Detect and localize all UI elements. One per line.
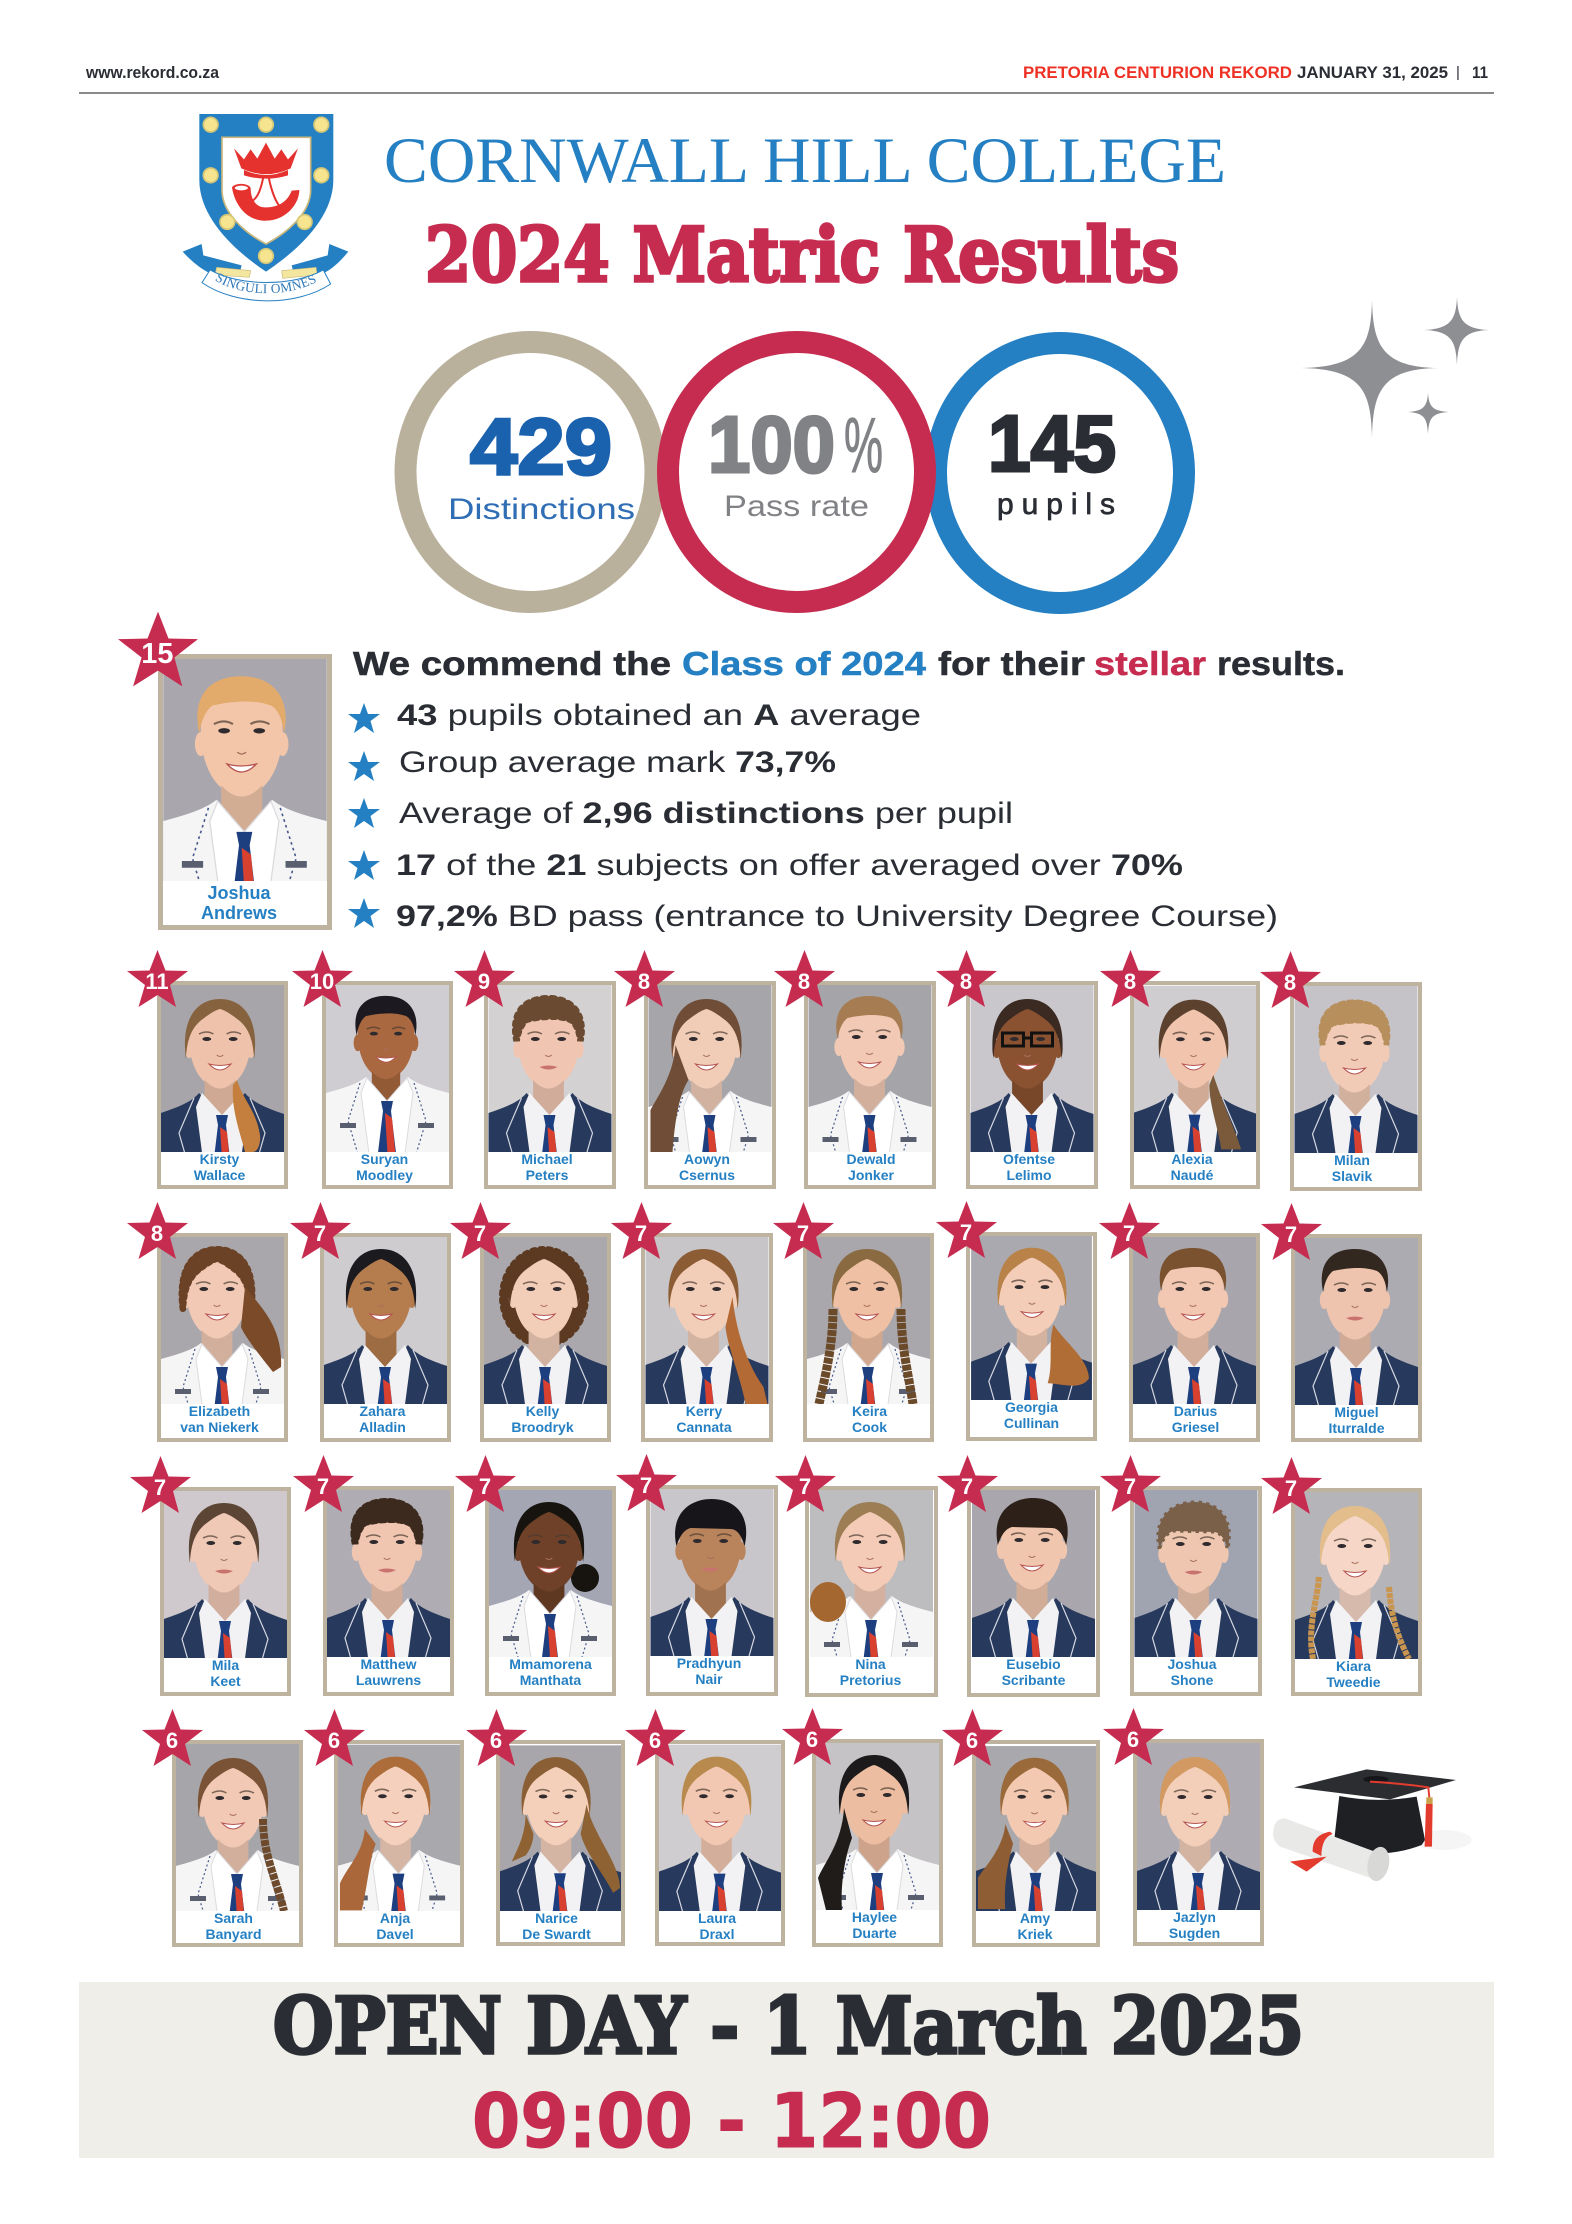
open day date: OPEN DAY - 1 March 2025 <box>273 1981 1304 2072</box>
pupil card: Joshua Andrews: Joshua <box>207 883 271 903</box>
pupil card: Ofentse Lelimo: 8 <box>960 969 972 994</box>
header: website: www.rekord.co.za <box>85 63 219 82</box>
pupil card: Haylee Duarte: Duarte <box>852 1924 897 1940</box>
pupil card: Alexia Naudé: Alexia <box>1171 1151 1213 1167</box>
pupil card: Milan Slavik: Milan <box>1334 1152 1370 1168</box>
pupil card: Haylee Duarte: 6 <box>806 1727 818 1752</box>
pupil card: Mmamorena Manthata <box>455 1455 616 1696</box>
pupil card: Sarah Banyard: 6 <box>166 1728 178 1753</box>
pupil card: Nina Pretorius <box>775 1455 938 1697</box>
stat: 100% pass rate: Pass rate <box>724 490 869 523</box>
pupil card: Sarah Banyard <box>142 1709 303 1947</box>
pupil card: Mmamorena Manthata: Manthata <box>520 1672 581 1688</box>
pupil card: Kerry Cannata: 7 <box>635 1221 647 1246</box>
pupil card: Suryan Moodley: Moodley <box>356 1166 413 1182</box>
pupil card: Dewald Jonker <box>774 950 936 1189</box>
heading: commendation: results. <box>1217 645 1345 682</box>
list: result bullet points: Group average mark 73,7% <box>399 746 836 779</box>
pupil card: Kirsty Wallace: 11 <box>145 969 169 994</box>
pupil card: Elizabeth van Niekerk <box>127 1202 288 1442</box>
pupil card: Matthew Lauwrens: 7 <box>317 1474 329 1499</box>
pupil card: Laura Draxl: Laura <box>698 1910 736 1926</box>
pupil card: Amy Kriek: Amy <box>1020 1910 1050 1926</box>
pupil card: Nina Pretorius: 7 <box>799 1474 811 1499</box>
header: publication, date and page: PRETORIA CENTURION REKORD <box>1023 63 1292 82</box>
heading: commendation: Class of 2024 <box>682 645 927 682</box>
title: school name: CORNWALL HILL COLLEGE <box>384 125 1226 197</box>
pupil card: Elizabeth van Niekerk: Elizabeth <box>189 1403 250 1419</box>
pupil card: Dewald Jonker: 8 <box>798 969 810 994</box>
pupil card: Amy Kriek: Kriek <box>1017 1926 1053 1942</box>
pupil card: Elizabeth van Niekerk: 8 <box>151 1221 163 1246</box>
pupil card: Michael Peters: 9 <box>478 969 490 994</box>
stat: 100% pass rate: % <box>844 401 883 489</box>
pupil card: Keira Cook: Keira <box>852 1403 887 1419</box>
pupil card: Anja Davel: 6 <box>328 1728 340 1753</box>
stat: 145 pupils <box>936 343 1184 603</box>
pupil card: Mmamorena Manthata: 7 <box>479 1474 491 1499</box>
pupil card: Zahara Alladin: Zahara <box>360 1403 405 1419</box>
list: result bullet points: Average of 2,96 distinctions per pupil <box>399 797 1013 830</box>
pupil card: Suryan Moodley <box>292 950 453 1189</box>
pupil card: Eusebio Scribante: Eusebio <box>1006 1656 1061 1672</box>
pupil card: Mila Keet <box>130 1456 291 1696</box>
pupil card: Keira Cook <box>773 1202 934 1442</box>
heading: commendation <box>353 645 1345 682</box>
pupil card: Joshua Shone: 7 <box>1124 1474 1136 1499</box>
pupil card: Darius Griesel <box>1099 1202 1260 1442</box>
pupil card: Aowyn Csernus: 8 <box>638 969 650 994</box>
pupil card: Narice De Swardt: De Swardt <box>522 1926 591 1942</box>
icon: graduation cap and diploma <box>1273 1769 1472 1883</box>
pupil card: Eusebio Scribante: 7 <box>961 1474 973 1499</box>
pupil card: Joshua Shone: Shone <box>1171 1672 1213 1688</box>
pupil card: Dewald Jonker: Jonker <box>848 1166 894 1182</box>
pupil card: Mila Keet: Mila <box>212 1657 239 1673</box>
stat: 145 pupils: pupils <box>997 488 1115 521</box>
pupil card: Milan Slavik <box>1260 951 1422 1191</box>
pupil card: Narice De Swardt: Narice <box>535 1910 578 1926</box>
stat: 429 distinctions: 429 <box>470 402 612 491</box>
pupil card: Ofentse Lelimo <box>936 950 1098 1189</box>
pupil card: Narice De Swardt <box>466 1709 625 1946</box>
stat: 429 distinctions <box>406 342 656 602</box>
pupil card: Darius Griesel: Darius <box>1174 1403 1217 1419</box>
pupil card: Ofentse Lelimo: Ofentse <box>1003 1151 1055 1167</box>
header: publication, date and page: | <box>1456 64 1460 81</box>
pupil card: Darius Griesel: Griesel <box>1172 1418 1219 1434</box>
pupil card: Suryan Moodley: 10 <box>310 969 334 994</box>
pupil card: Michael Peters <box>454 950 616 1189</box>
pupil card: Kerry Cannata: Kerry <box>686 1403 722 1419</box>
pupil card: Nina Pretorius: Pretorius <box>840 1672 901 1688</box>
pupil card: Zahara Alladin <box>290 1202 451 1442</box>
pupil card: Mmamorena Manthata: Mmamorena <box>509 1656 592 1672</box>
pupil card: Kirsty Wallace <box>127 950 288 1189</box>
pupil card: Alexia Naudé: 8 <box>1124 969 1136 994</box>
pupil card: Keira Cook: 7 <box>797 1221 809 1246</box>
pupil card: Michael Peters: Peters <box>526 1166 568 1182</box>
pupil card: Georgia Cullinan: Cullinan <box>1004 1414 1059 1430</box>
pupil card: Matthew Lauwrens: Matthew <box>360 1656 416 1672</box>
heading: commendation: We commend the <box>353 645 671 682</box>
pupil card: Alexia Naudé <box>1100 950 1260 1189</box>
pupil card: Amy Kriek: 6 <box>966 1728 978 1753</box>
pupil card: Laura Draxl <box>625 1709 785 1946</box>
pupil card: Laura Draxl: Draxl <box>699 1926 735 1942</box>
pupil card: Pradhyun Nair: 7 <box>640 1473 652 1498</box>
pupil card: Matthew Lauwrens <box>293 1455 454 1696</box>
pupil card: Kelly Broodryk: 7 <box>474 1221 486 1246</box>
pupil card: Sarah Banyard: Banyard <box>205 1926 262 1942</box>
pupil card: Darius Griesel: 7 <box>1123 1221 1135 1246</box>
pupil card: Jazlyn Sugden <box>1103 1708 1264 1946</box>
heading: 2024 Matric Results: 2024 Matric Results <box>425 211 1179 299</box>
list: result bullet points: 17 of the 21 subjects on offer averaged over 70% <box>396 849 1183 882</box>
pupil card: Sarah Banyard: Sarah <box>214 1910 253 1926</box>
pupil card: Pradhyun Nair <box>616 1454 778 1696</box>
pupil card: Miguel Iturralde: 7 <box>1285 1222 1297 1247</box>
pupil card: Anja Davel: Anja <box>380 1910 410 1926</box>
pupil card: Nina Pretorius: Nina <box>855 1656 886 1672</box>
list: result bullet points: 97,2% BD pass (entrance to University Degree Course) <box>396 900 1278 933</box>
pupil card: Mila Keet: Keet <box>210 1672 241 1688</box>
pupil card: Kiara Tweedie: 7 <box>1285 1476 1297 1501</box>
pupil card: Miguel Iturralde <box>1261 1203 1422 1442</box>
pupil card: Aowyn Csernus: Csernus <box>679 1166 735 1182</box>
pupil card: Pradhyun Nair: Nair <box>695 1670 723 1686</box>
pupil card: Kerry Cannata: Cannata <box>676 1418 732 1434</box>
pupil card: Kirsty Wallace: Wallace <box>194 1166 245 1182</box>
stat: 429 distinctions: Distinctions <box>448 493 635 526</box>
header: publication, date and page: JANUARY 31, 2025 <box>1297 63 1448 82</box>
pupil card: Keira Cook: Cook <box>852 1418 887 1434</box>
stat: 145 pupils: 145 <box>988 399 1116 488</box>
pupil card: Jazlyn Sugden: Jazlyn <box>1173 1909 1216 1925</box>
pupil card: Georgia Cullinan: 7 <box>960 1220 972 1245</box>
pupil card: Ofentse Lelimo: Lelimo <box>1006 1166 1052 1182</box>
pupil card: Matthew Lauwrens: Lauwrens <box>356 1672 421 1688</box>
pupil card: Suryan Moodley: Suryan <box>361 1151 408 1167</box>
pupil card: Aowyn Csernus <box>614 950 776 1189</box>
panel: open day <box>79 1981 1494 2165</box>
list: result bullet points <box>348 699 1278 933</box>
pupil card: Joshua Shone: Joshua <box>1167 1656 1216 1672</box>
open day time: 09:00 - 12:00 <box>472 2077 991 2165</box>
pupil card: Georgia Cullinan: Georgia <box>1005 1399 1058 1415</box>
icon: sparkles <box>1301 297 1489 438</box>
pupil card: Jazlyn Sugden: Sugden <box>1169 1924 1220 1940</box>
header: publication, date and page <box>1023 63 1488 82</box>
pupil card: Narice De Swardt: 6 <box>490 1728 502 1753</box>
pupil card: Amy Kriek <box>942 1709 1100 1947</box>
pupil card: Joshua Andrews <box>118 612 332 930</box>
pupil card: Georgia Cullinan <box>936 1201 1097 1441</box>
pupil card: Joshua Shone <box>1100 1455 1262 1696</box>
stat: 100% pass rate: 100 <box>708 400 835 489</box>
heading: commendation: stellar <box>1094 645 1206 682</box>
heading: commendation: for their <box>938 645 1085 682</box>
pupil card: Joshua Andrews: Andrews <box>201 903 277 923</box>
pupil card: Kelly Broodryk: Broodryk <box>511 1418 574 1434</box>
pupil card: Zahara Alladin: Alladin <box>359 1418 406 1434</box>
pupil card: Elizabeth van Niekerk: van Niekerk <box>180 1418 259 1434</box>
pupil card: Jazlyn Sugden: 6 <box>1127 1727 1139 1752</box>
list: result bullet points: 43 pupils obtained an A average <box>397 699 921 732</box>
pupil card: Eusebio Scribante <box>937 1455 1100 1697</box>
pupil card: Zahara Alladin: 7 <box>314 1221 326 1246</box>
pupil card: Laura Draxl: 6 <box>649 1728 661 1753</box>
icon: school crest: SINGULI OMNES <box>216 274 316 294</box>
pupil card: Michael Peters: Michael <box>521 1151 573 1167</box>
pupil card: Anja Davel <box>304 1709 464 1947</box>
pupil card: Milan Slavik: Slavik <box>1332 1168 1372 1184</box>
pupil card: Kerry Cannata <box>611 1202 773 1442</box>
icon: school crest <box>182 114 348 302</box>
pupil card: Anja Davel: Davel <box>376 1926 414 1942</box>
stat: 100% pass rate <box>668 342 925 602</box>
pupil card: Alexia Naudé: Naudé <box>1171 1166 1213 1182</box>
pupil card: Kiara Tweedie: Tweedie <box>1326 1674 1381 1690</box>
pupil card: Joshua Andrews: 15 <box>141 638 173 670</box>
pupil card: Kelly Broodryk <box>450 1202 611 1442</box>
pupil card: Kirsty Wallace: Kirsty <box>200 1151 239 1167</box>
pupil card: Milan Slavik: 8 <box>1284 970 1296 995</box>
pupil card: Pradhyun Nair: Pradhyun <box>677 1655 741 1671</box>
pupil card: Aowyn Csernus: Aowyn <box>684 1151 730 1167</box>
header: publication, date and page: 11 <box>1472 63 1488 82</box>
pupil card: Haylee Duarte: Haylee <box>852 1909 897 1925</box>
pupil card: Eusebio Scribante: Scribante <box>1002 1672 1065 1688</box>
pupil card: Dewald Jonker: Dewald <box>846 1151 896 1167</box>
pupil card: Kiara Tweedie <box>1261 1457 1422 1696</box>
pupil card: Miguel Iturralde: Iturralde <box>1328 1420 1384 1436</box>
pupil card: Mila Keet: 7 <box>154 1475 166 1500</box>
pupil card: Kiara Tweedie: Kiara <box>1336 1658 1371 1674</box>
pupil card: Miguel Iturralde: Miguel <box>1334 1404 1379 1420</box>
pupil card: Kelly Broodryk: Kelly <box>526 1403 559 1419</box>
pupil card: Haylee Duarte <box>782 1708 943 1947</box>
